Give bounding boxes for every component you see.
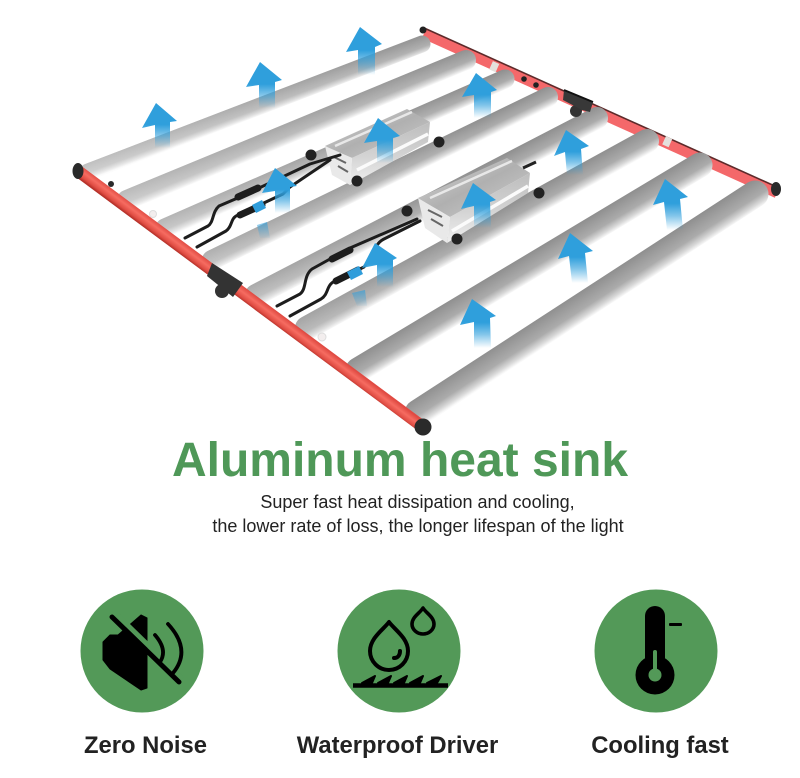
- front bar clip: [207, 263, 243, 298]
- front red bar: [72, 163, 432, 436]
- cables: [185, 155, 420, 316]
- feature: zero noise: [80, 590, 207, 759]
- back bar clip and tags: [489, 61, 672, 147]
- icon: thermometer: [594, 590, 718, 712]
- back red bar: [420, 26, 781, 196]
- description text: the lower rate of loss, the longer lifespan of the light: [212, 516, 624, 536]
- description text: [212, 492, 624, 536]
- heat flow arrows: [142, 27, 688, 348]
- feature: cooling fast: [591, 590, 729, 759]
- title: Aluminum heat sink: [172, 434, 628, 487]
- label: Cooling fast: [591, 732, 729, 759]
- driver box 2: [402, 158, 544, 244]
- label: Zero Noise: [84, 732, 207, 759]
- driver box 1: [306, 109, 444, 186]
- icon: water drops: [338, 590, 460, 712]
- label: Waterproof Driver: [297, 732, 498, 759]
- description text: Super fast heat dissipation and cooling,: [260, 492, 575, 512]
- feature: waterproof driver: [297, 590, 498, 759]
- icon: muted speaker: [80, 590, 204, 712]
- product: light fixture: [72, 26, 781, 436]
- heat sink tubes: [88, 44, 755, 413]
